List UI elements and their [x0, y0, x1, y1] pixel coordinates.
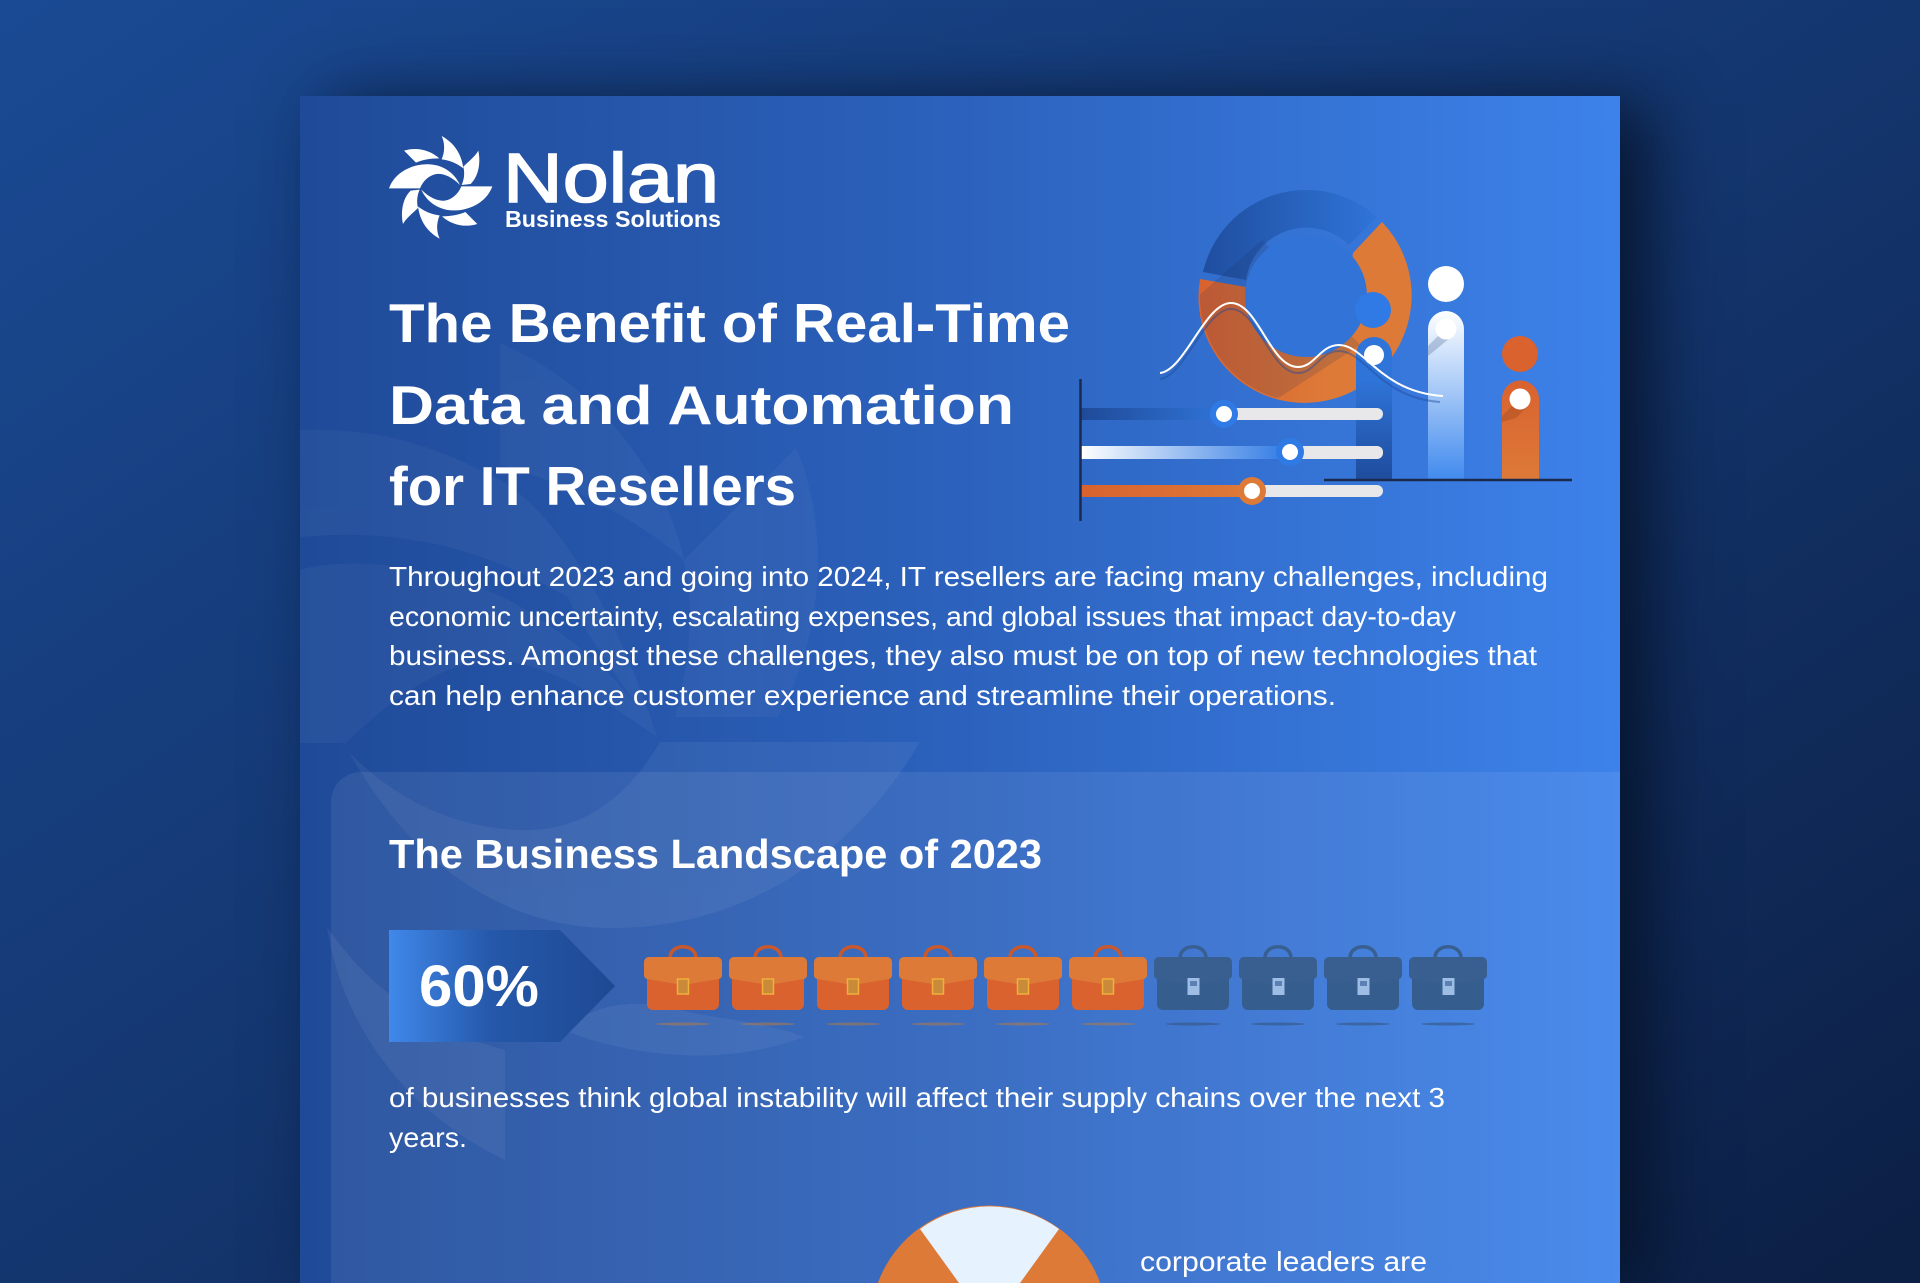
briefcase 2	[729, 947, 807, 1026]
briefcase 4	[899, 947, 977, 1026]
title: for IT Resellers	[389, 455, 796, 517]
white bar	[1428, 311, 1464, 480]
stat tag: 60%	[389, 930, 615, 1042]
stat description: of businesses think global instability will affect their supply chains over the next 3	[389, 1082, 1445, 1113]
briefcase 3	[814, 947, 892, 1026]
briefcase 9	[1324, 947, 1402, 1026]
briefcase pictogram row	[644, 947, 1487, 1026]
pie chart	[878, 1205, 1100, 1283]
orange bar	[1502, 380, 1539, 480]
intro paragraph: Throughout 2023 and going into 2024, IT resellers are facing many challenges, including	[389, 561, 1548, 592]
briefcase 1	[644, 947, 722, 1026]
card shadow	[300, 96, 1620, 1283]
axes	[1080, 379, 1572, 521]
stat description	[389, 1082, 1445, 1153]
intro paragraph: can help enhance customer experience and streamline their operations.	[389, 680, 1336, 711]
watermark swirl: upper	[300, 343, 818, 743]
intro paragraph	[389, 561, 1548, 711]
briefcase 7	[1154, 947, 1232, 1026]
donut chart	[1198, 190, 1412, 403]
briefcase 10	[1409, 947, 1487, 1026]
chart illustration	[1080, 190, 1572, 521]
briefcase 5	[984, 947, 1062, 1026]
icon: pinwheel swirl	[389, 136, 492, 239]
logo wordmark: Nolan	[503, 139, 719, 217]
watermark swirl: lower	[327, 742, 920, 1160]
card panel	[300, 96, 1620, 1283]
slider 2	[1081, 438, 1383, 466]
intro paragraph: economic uncertainty, escalating expenses, and global issues that impact day-to-day	[389, 601, 1456, 632]
logo tagline: Business Solutions	[505, 206, 721, 232]
logo	[389, 136, 721, 239]
slider 3	[1081, 477, 1383, 505]
title	[389, 292, 1070, 517]
stat description: years.	[389, 1122, 467, 1153]
stat tag: 60%: 60%	[419, 954, 539, 1019]
intro paragraph: business. Amongst these challenges, they also must be on top of new technologies that	[389, 640, 1537, 671]
title: The Benefit of Real-Time	[389, 292, 1070, 354]
section heading: The Business Landscape of 2023	[389, 831, 1042, 877]
briefcase 6	[1069, 947, 1147, 1026]
slider 1	[1081, 400, 1383, 428]
lower section panel	[331, 772, 1620, 1283]
title: Data and Automation	[389, 374, 1014, 436]
callout text: corporate leaders are	[1140, 1246, 1427, 1277]
line chart	[1160, 309, 1440, 402]
blue bar	[1356, 337, 1392, 480]
briefcase 8	[1239, 947, 1317, 1026]
